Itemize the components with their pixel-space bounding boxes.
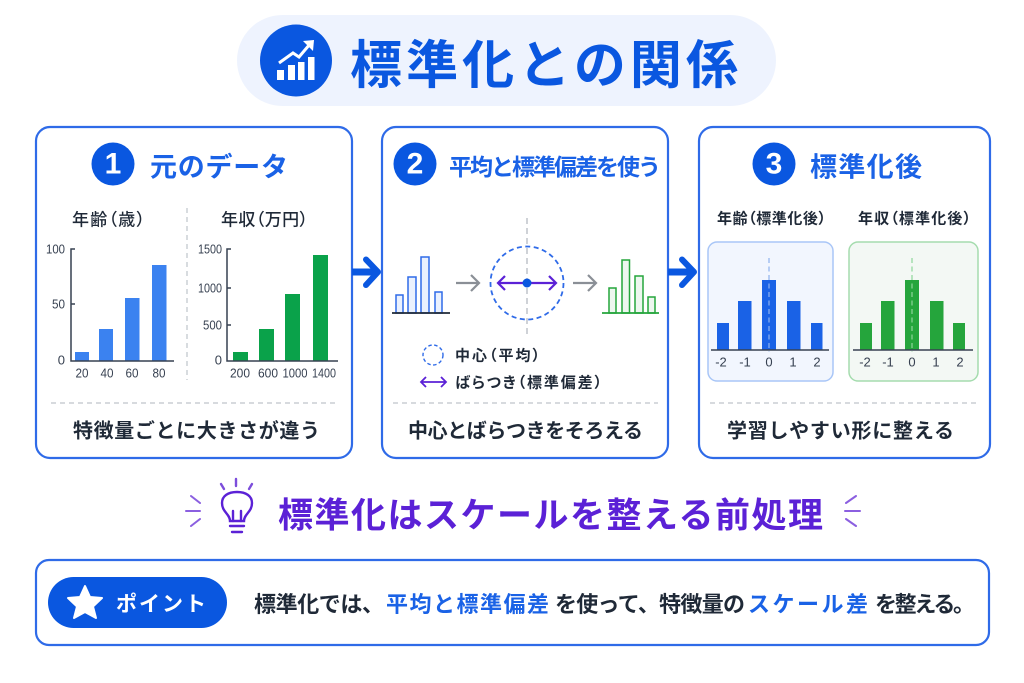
label: 年収（万円）: 年収（万円） xyxy=(221,206,308,230)
number badge 2 xyxy=(394,142,436,186)
chart: standardized age: -1 xyxy=(739,354,751,370)
bar chart: income: 0 xyxy=(215,352,222,368)
number badge 1 xyxy=(92,142,134,186)
badge: ポイント xyxy=(48,577,227,628)
bar chart: income: 600 xyxy=(258,366,278,380)
bar chart: age: 20 xyxy=(76,366,88,380)
heading: 平均と標準偏差を使う: 平均と標準偏差を使う xyxy=(449,148,661,182)
point sentence: 平均と標準偏差 xyxy=(386,587,549,619)
number badge 2: 2 xyxy=(407,148,423,180)
point sentence: 標準化では、 xyxy=(254,587,384,619)
bar chart: age: 50 xyxy=(52,296,65,312)
label: 年齢（標準化後）: 年齢（標準化後） xyxy=(717,208,826,228)
number badge 3 xyxy=(752,142,796,186)
chart: standardized income: 0 xyxy=(908,354,916,370)
panel: 元のデータ xyxy=(36,127,352,458)
mini chart: blue original xyxy=(392,257,450,313)
title text: 標準化との関係 xyxy=(350,24,738,98)
bar chart: age: 0 xyxy=(58,352,65,368)
legend: spread: ばらつき（標準偏差） xyxy=(455,372,602,392)
legend: centre: 中心（平均） xyxy=(455,344,540,366)
bar chart: income: 1500 xyxy=(198,242,222,256)
title banner xyxy=(237,15,776,106)
caption: 特徴量ごとに大きさが違う xyxy=(73,414,320,444)
bar chart: income: 1400 xyxy=(312,366,336,380)
bar chart: age xyxy=(46,242,174,380)
bar chart: age: 60 xyxy=(126,366,138,380)
caption: 中心とばらつきをそろえる xyxy=(408,414,643,444)
caption: 学習しやすい形に整える xyxy=(727,414,954,444)
number badge 1: 1 xyxy=(105,148,121,180)
chart: standardized age: 2 xyxy=(813,354,821,370)
chart: standardized age: 1 xyxy=(789,354,797,370)
diagram: centre and spread xyxy=(490,218,564,336)
takeaway message xyxy=(186,479,860,538)
bar chart: age: 40 xyxy=(100,366,114,380)
panel: 平均と標準偏差を使う xyxy=(382,127,668,458)
number badge 3: 3 xyxy=(766,148,782,180)
chart: standardized income: 1 xyxy=(932,354,940,370)
takeaway text: 標準化はスケールを整える前処理 xyxy=(278,488,823,538)
arrow: panel 2 to 3 xyxy=(668,260,694,285)
bar chart: income: 1000 xyxy=(198,280,222,296)
sparks right xyxy=(845,496,860,526)
bar chart: income: 200 xyxy=(230,366,250,380)
bar chart: income xyxy=(198,242,338,380)
bar chart: age: 100 xyxy=(46,242,65,256)
panel: 標準化後 xyxy=(699,127,990,458)
icon: star xyxy=(68,586,102,618)
arrow: panel 1 to 2 xyxy=(352,260,378,285)
label: 年収（標準化後）: 年収（標準化後） xyxy=(858,208,971,228)
point sentence: を使って、特徴量の xyxy=(555,587,745,619)
bar chart: age: 80 xyxy=(152,366,166,380)
chart: standardized income: 2 xyxy=(956,354,964,370)
chart: standardized income xyxy=(849,242,978,381)
chart: standardized income: -1 xyxy=(882,354,894,370)
bar chart: income: 500 xyxy=(203,318,222,332)
chart: standardized age: -2 xyxy=(715,354,727,370)
heading: 標準化後: 標準化後 xyxy=(810,146,922,184)
panel: point xyxy=(36,560,989,645)
point sentence: スケール差 xyxy=(748,587,868,619)
arrow: grey xyxy=(573,275,596,291)
heading: 元のデータ: 元のデータ xyxy=(150,146,288,184)
icon: rising chart xyxy=(260,24,332,96)
arrow: grey xyxy=(456,275,479,291)
chart: standardized age: 0 xyxy=(765,354,773,370)
chart: standardized age xyxy=(708,242,833,381)
label: 年齢（歳）: 年齢（歳） xyxy=(72,206,145,230)
icon: light bulb xyxy=(221,479,252,532)
bar chart: income: 1000 xyxy=(282,366,308,380)
sparks left xyxy=(186,496,200,526)
point sentence xyxy=(254,587,975,619)
mini chart: green result xyxy=(602,260,659,313)
point sentence: を整える。 xyxy=(875,587,975,619)
chart: standardized income: -2 xyxy=(859,354,871,370)
badge: ポイント: ポイント xyxy=(116,588,206,618)
